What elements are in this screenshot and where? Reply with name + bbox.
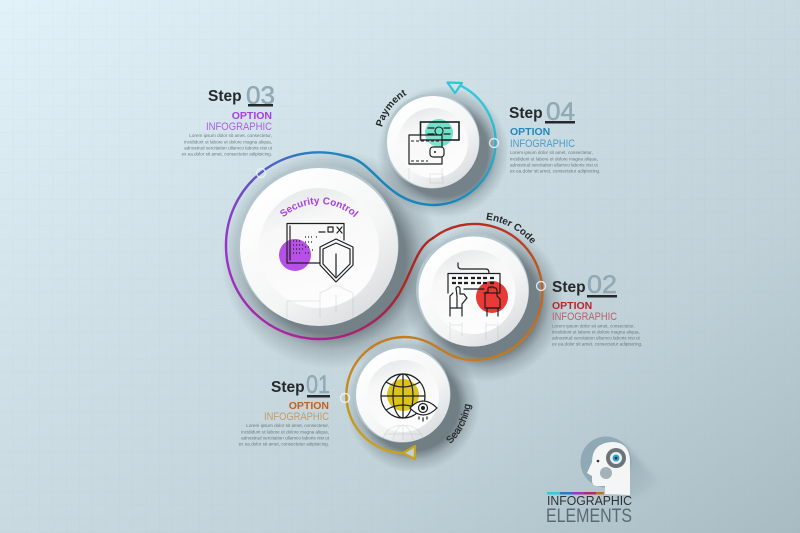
text block: step 02: incididunt ut labore et dolore magna aliqua, <box>552 330 640 334</box>
icon: head with gear <box>580 436 660 497</box>
text block: step 03: INFOGRAPHIC <box>206 121 272 133</box>
text block: step 02: INFOGRAPHIC <box>552 311 617 323</box>
panel: step 4 payment disc <box>384 94 480 188</box>
text block: step 03: OPTION <box>232 110 272 122</box>
curved label: payment: Payment <box>376 90 407 127</box>
text block: step 01: adnostrud xercitation ullamco laboris nisi ut <box>241 436 330 440</box>
icon reflection <box>383 425 423 440</box>
text block: step 04: 04 <box>546 98 575 126</box>
text block: step 02: adnostrud xercitation ullamco laboris nisi ut <box>552 336 641 340</box>
text block: step 01: ex ea.dolor sit amet, consectetur adipisicing. <box>239 442 329 446</box>
panel: step 1 searching disc <box>354 346 450 442</box>
text block: step 02: 02 <box>587 271 617 299</box>
logo wordmark: INFOGRAPHIC <box>547 494 632 508</box>
curved label: searching: Searching <box>446 404 472 443</box>
text block: step 03: Step <box>208 88 242 105</box>
text block: step 03: Lorem ipsum dolor sit amet, consectetur, <box>189 133 272 138</box>
text block: step 01 <box>239 371 330 446</box>
text block: step 01: 01 <box>306 371 330 399</box>
disc drop shadows <box>221 86 564 472</box>
text block: step 03: adnostrud xercitation ullamco laboris nisi ut <box>184 146 273 150</box>
icon: window and shield <box>279 224 353 282</box>
text block: step 02: OPTION <box>552 300 592 312</box>
text block: step 01: OPTION <box>289 400 329 412</box>
curved label: enter code: Enter Code <box>486 212 535 244</box>
text block: step 04: adnostrud xercitation ullamco laboris nisi ut <box>510 162 599 168</box>
text block: step 04: OPTION <box>510 126 550 138</box>
logo wordmark: ELEMENTS <box>546 506 632 527</box>
text block: step 01: INFOGRAPHIC <box>264 411 329 423</box>
panel: step 2 enter code disc <box>416 234 529 346</box>
curved label: security control: Security Control <box>280 197 359 218</box>
text block: step 04: ex ea.dolor sit amet, consectetur adipisicing. <box>510 168 600 174</box>
text block: step 04 <box>509 98 600 174</box>
icon: wallet and banknote <box>409 119 459 164</box>
logo: infographic elements <box>546 436 660 527</box>
icon: keyboard and hands <box>448 263 508 316</box>
text block: step 03: 03 <box>246 82 275 110</box>
arrowhead: path start at searching <box>403 446 415 459</box>
icon reflection <box>287 285 353 322</box>
colour bar <box>547 492 604 494</box>
text block: step 01: incididunt ut labore et dolore magna aliqua, <box>241 430 329 434</box>
text block: step 02: Step <box>552 279 586 296</box>
text block: step 03: ex ea.dolor sit amet, consectetur adipisicing. <box>182 152 272 156</box>
arrowhead: path end at payment <box>448 82 462 93</box>
text block: step 04: Step <box>509 105 543 122</box>
path node markers <box>256 138 546 402</box>
text block: step 02 <box>552 271 642 346</box>
text block: step 03: incididunt ut labore et dolore magna aliqua, <box>184 140 272 144</box>
text block: step 04: Lorem ipsum dolor sit amet, consectetur, <box>510 150 593 155</box>
text block: step 01: Step <box>271 379 305 396</box>
text block: step 04: incididunt ut labore et dolore magna aliqua, <box>510 156 598 162</box>
icon: globe and eye <box>381 374 437 421</box>
icon reflection <box>450 322 498 340</box>
icon reflection <box>409 168 443 183</box>
text block: step 01: Lorem ipsum dolor sit amet, consectetur, <box>246 423 329 428</box>
text block: step 04: INFOGRAPHIC <box>510 138 575 150</box>
text block: step 03 <box>182 82 275 156</box>
logo wordmark <box>546 494 632 527</box>
panel: step 3 security control disc <box>238 166 398 326</box>
text block: step 02: ex ea.dolor sit amet, consectetur adipisicing. <box>552 342 642 346</box>
text block: step 02: Lorem ipsum dolor sit amet, consectetur, <box>552 324 635 328</box>
winding timeline path <box>226 84 542 453</box>
